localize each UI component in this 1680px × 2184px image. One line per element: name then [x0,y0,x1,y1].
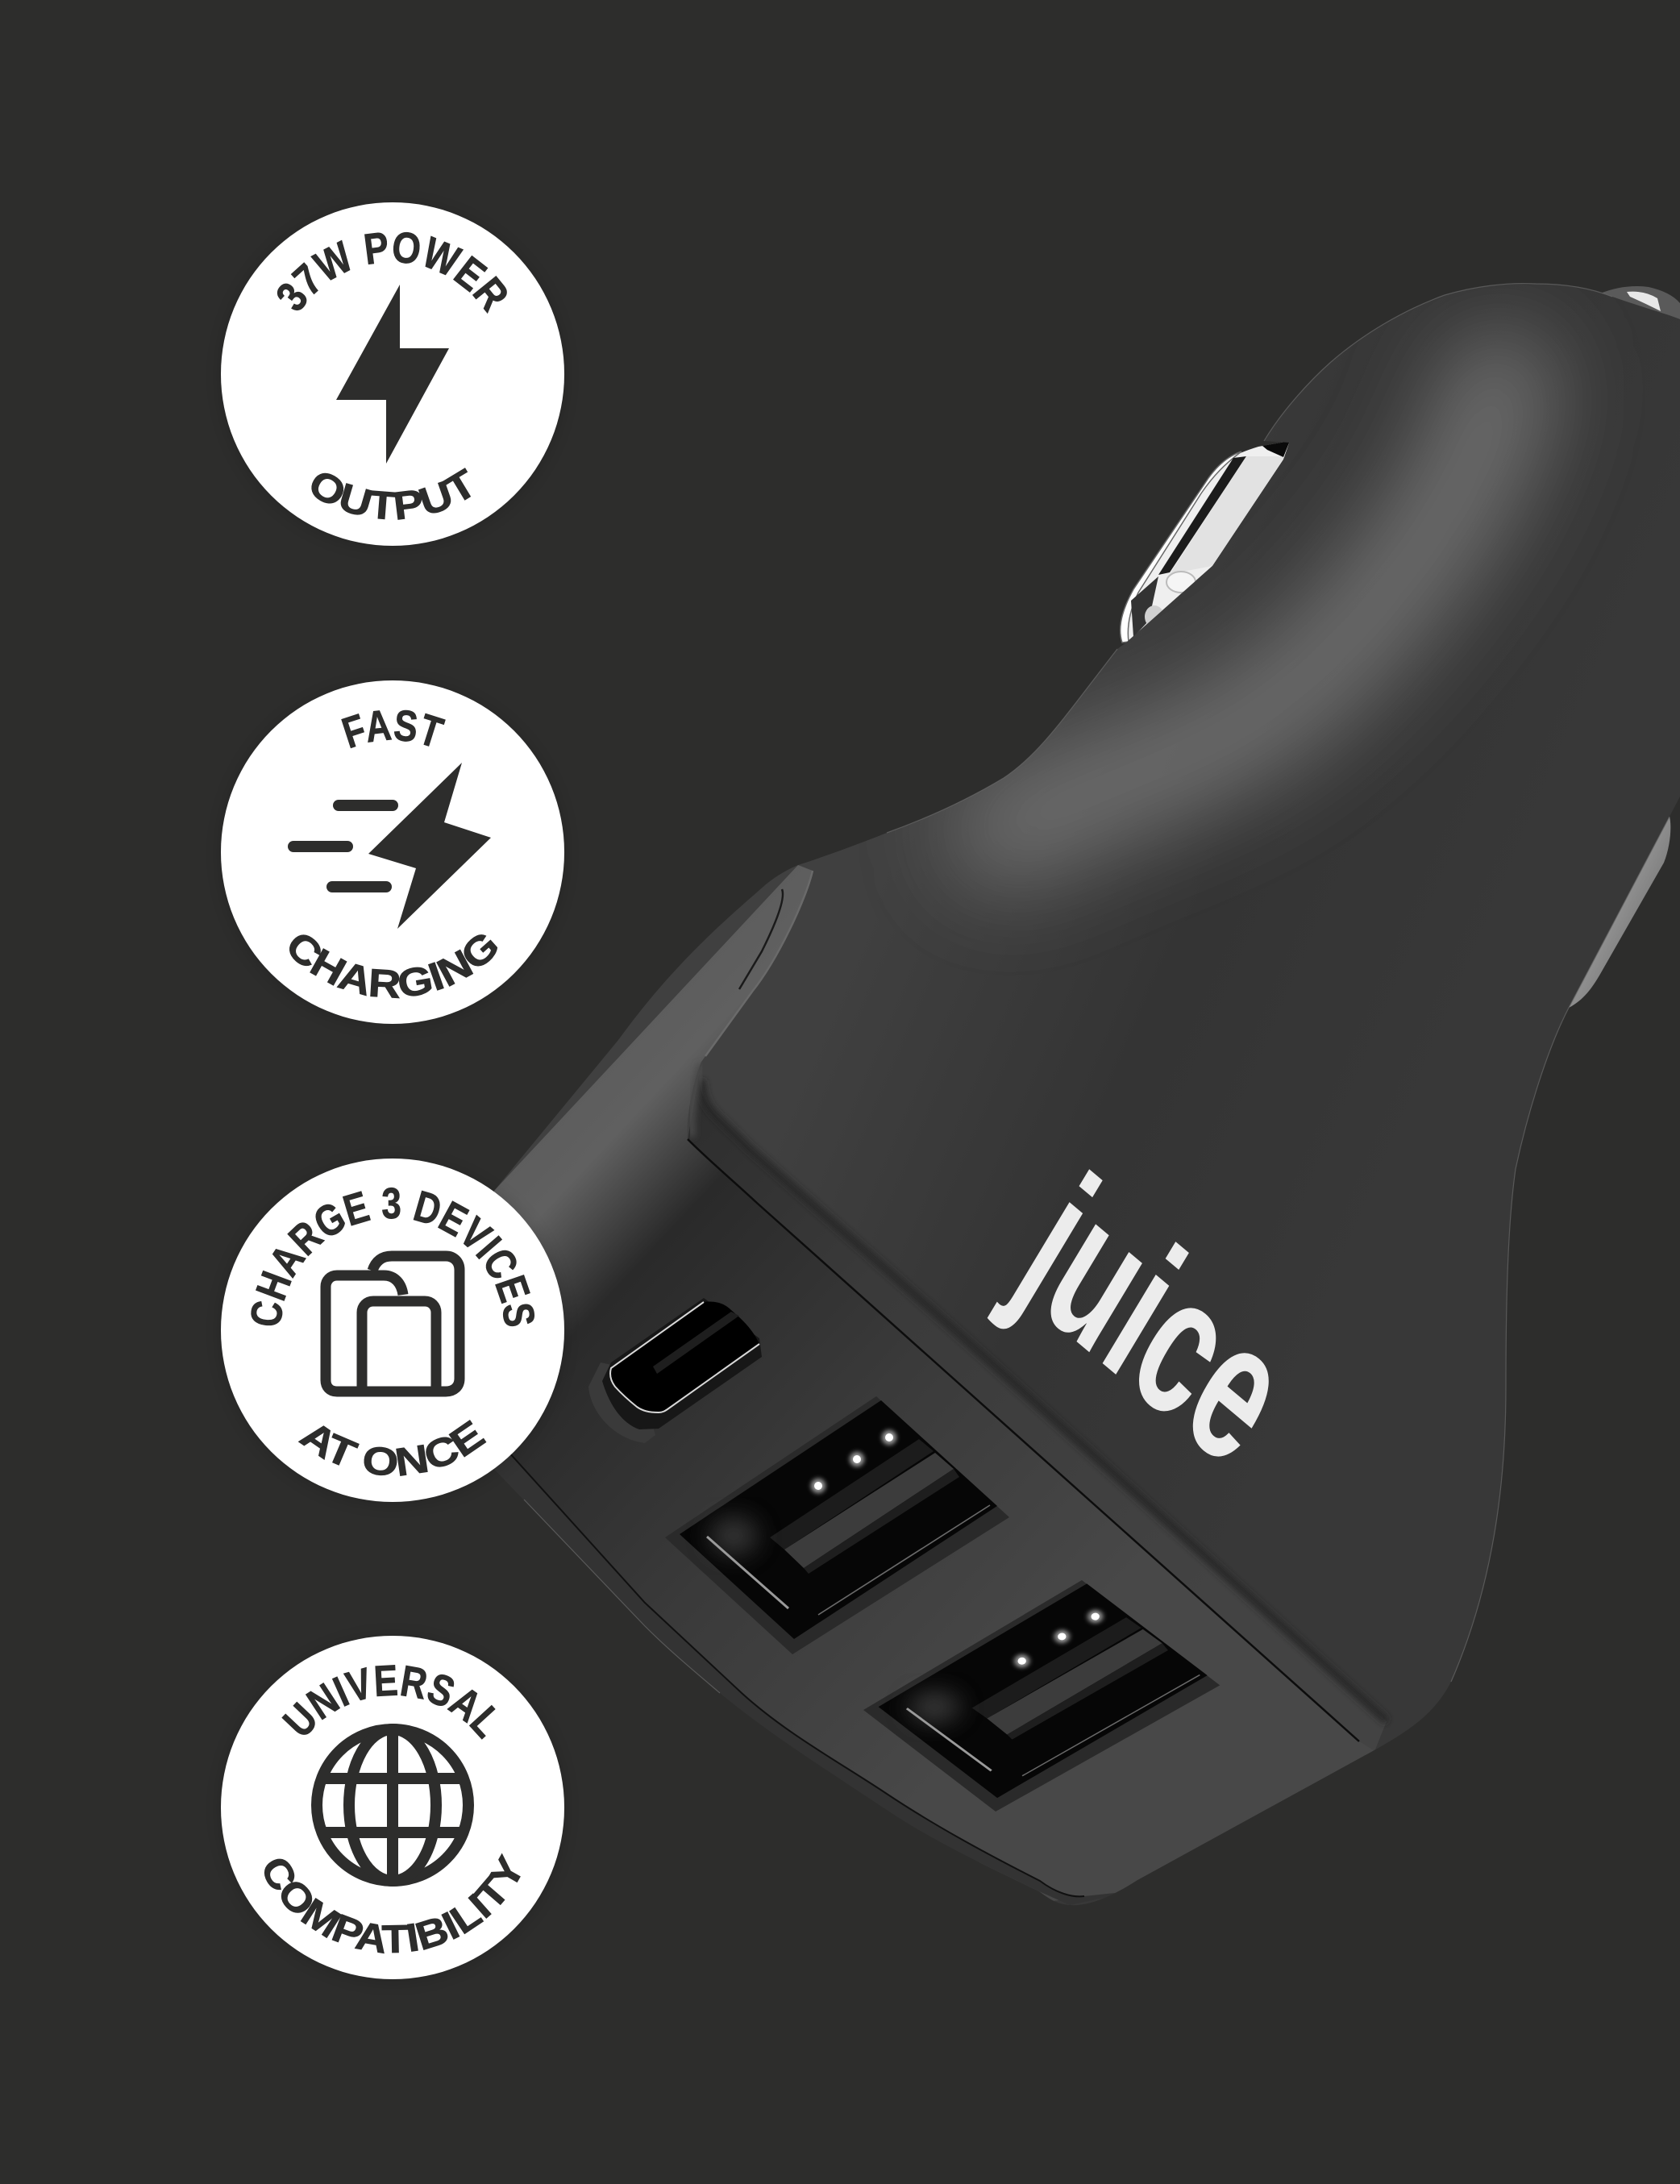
side spring contact [1569,817,1670,1008]
icon: speeding bolt [288,763,491,929]
icon: globe [317,1729,468,1881]
badge: fast charging [221,680,564,1024]
badge: charge 3 devices at once [221,1159,564,1502]
body edge line [524,284,1670,1693]
badge bottom label: COMPATIBILITY [264,1853,521,1954]
badge top label: 37W POWER [277,232,507,314]
panel corner highlight [705,871,813,1056]
USB-C port [588,1298,762,1443]
panel corner soft edge [692,1064,701,1137]
badge top label: CHARGE 3 DEVICES [251,1187,535,1327]
badge: 37W power output [221,202,564,546]
badge: universal compatibility [221,1636,564,1979]
badge disc [221,1159,564,1502]
infographic canvas [221,202,1680,1979]
badge bottom label: AT ONCE [298,1420,487,1476]
badge disc [221,680,564,1024]
panel shadow edge [701,1080,1387,1721]
icon: three devices [326,1256,460,1392]
car charger product [493,283,1680,1905]
lower seam line [508,1451,1084,1896]
badge bottom label: CHARGING [289,934,498,998]
badge bottom label: OUTPUT [311,468,471,520]
main body shell [497,285,1680,1905]
upper chrome contact [1121,441,1290,643]
icon: lightning bolt [336,285,449,464]
cap groove [739,889,783,989]
charger body [493,284,1680,1905]
juice logo: juice [986,1133,1321,1507]
panel lower bevel [688,1062,1387,1762]
seam line [688,1139,1359,1741]
cap and port face [451,865,1379,1903]
badge disc [221,202,564,546]
USB-A port one [665,1396,1009,1654]
badge top label: FAST [341,709,446,748]
lower edge band [494,1467,1114,1900]
tip contact pin [1600,286,1680,331]
badge disc [221,1636,564,1979]
soft top highlight [1008,387,1499,830]
USB-A port two [863,1578,1220,1814]
badge top label: UNIVERSAL [281,1665,496,1740]
